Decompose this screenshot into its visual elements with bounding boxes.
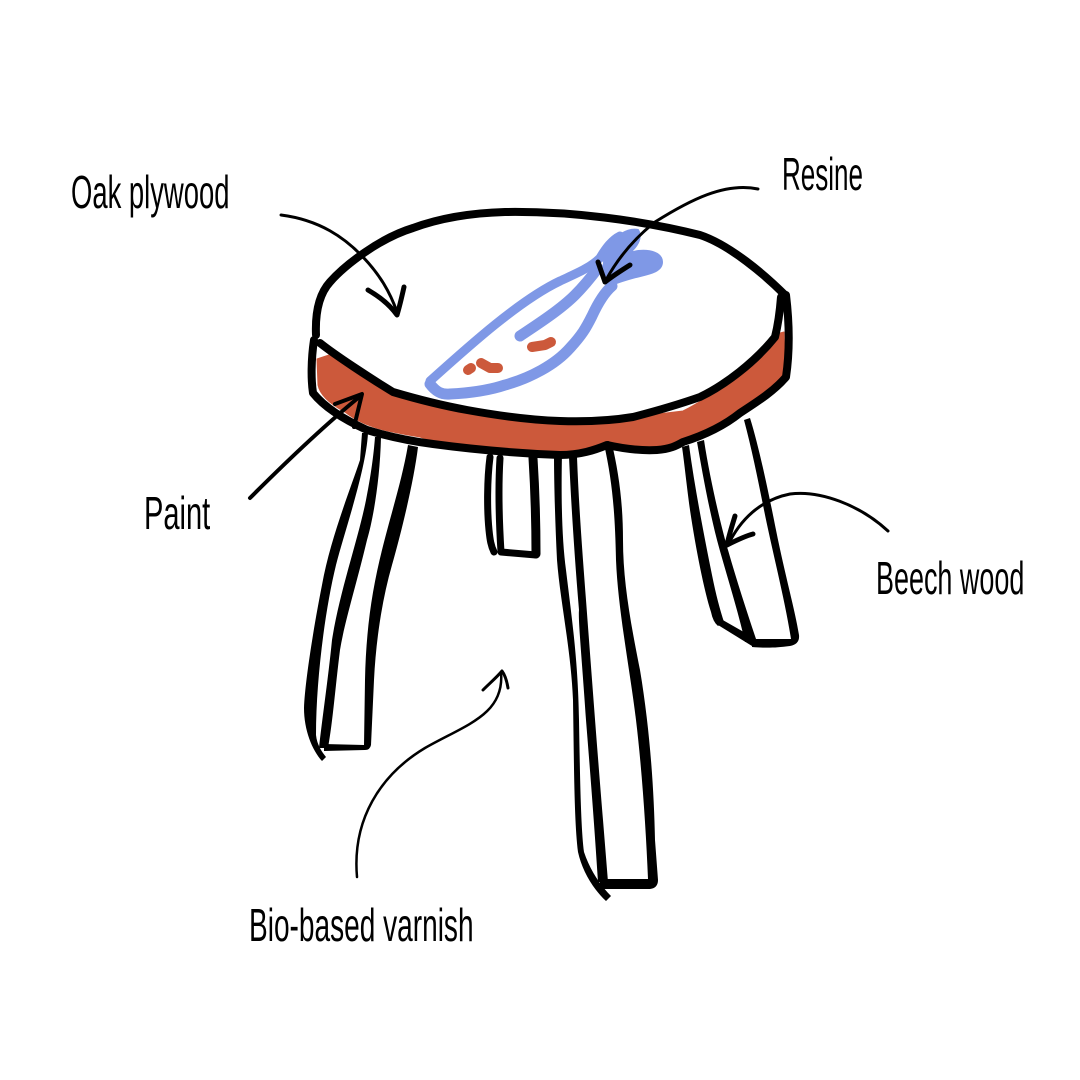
arrow: bio-based varnish	[356, 671, 508, 877]
arrow: oak plywood	[281, 215, 404, 315]
leg: back middle	[488, 457, 536, 555]
resin top lobes	[604, 230, 662, 286]
label: Bio-based varnish: Bio-based varnish	[249, 901, 474, 952]
seat front edge	[320, 297, 781, 421]
leg: front	[554, 441, 658, 901]
label: Resine: Resine	[782, 148, 863, 200]
arrow: paint	[250, 394, 362, 498]
label: Beech wood: Beech wood	[876, 553, 1024, 604]
resin upper outline	[430, 236, 620, 381]
stool illustration	[250, 187, 888, 901]
resin red spots	[468, 342, 551, 370]
label: Paint: Paint	[144, 488, 210, 540]
resin inner strand	[520, 268, 598, 336]
leg: right	[682, 418, 799, 648]
resin inlay	[430, 230, 662, 394]
seat top outline	[316, 212, 785, 335]
seat underside outline	[312, 295, 789, 455]
resin lower outline	[430, 286, 612, 394]
arrow: resine	[598, 187, 758, 282]
arrow: beech wood	[727, 493, 888, 545]
painted red seat edge	[317, 332, 786, 453]
leg: left	[304, 433, 418, 761]
label: Oak plywood: Oak plywood	[71, 168, 229, 219]
